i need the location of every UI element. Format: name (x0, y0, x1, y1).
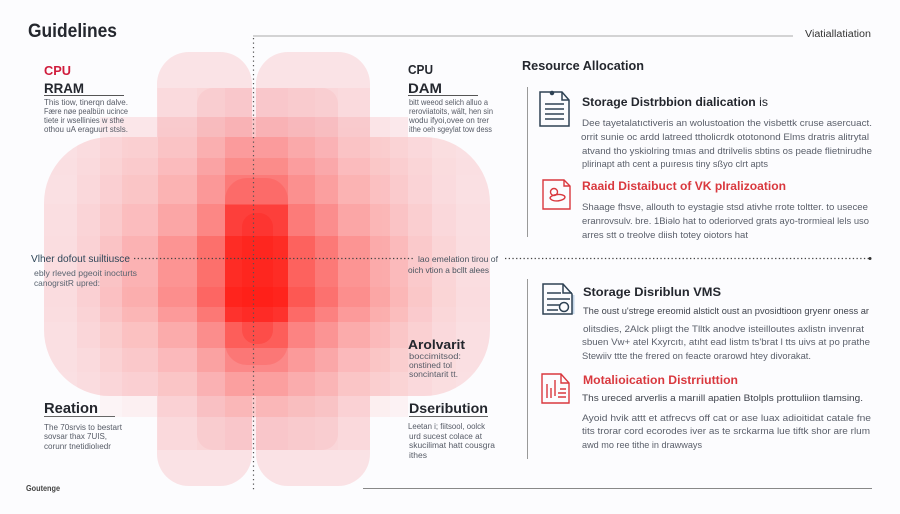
block: middle right: oich vtion a bcllt alees (408, 265, 489, 275)
block: CPU RRAM: tiete ir wsellinies w sthe (44, 116, 125, 125)
item text (581, 118, 872, 170)
block: Arolvarit: onstined tol (409, 361, 452, 370)
block: CPU RRAM: othou uA eraguurt stsls. (44, 125, 128, 134)
block: CPU DAM: DAM (408, 80, 442, 96)
item heading: Storage Disriblun VMS (583, 285, 721, 299)
horizontal dotted axis (134, 258, 870, 260)
block: Dseribution: ithes (409, 451, 427, 460)
block: CPU DAM: bitt weeod selich alluo a (409, 98, 489, 107)
block: Dseribution: Leetan i; fiitsool, oolck (408, 422, 486, 431)
footer label: Goutenge (26, 484, 60, 493)
block: Reation: The 70srvis to bestart (44, 423, 123, 432)
block: CPU DAM: CPU (408, 62, 433, 77)
block: CPU RRAM: CPU (44, 63, 71, 78)
block: CPU RRAM: This tiow, tinerqn dalve. (44, 98, 128, 107)
block: CPU DAM: wodu ifyoi,ovee on trer (408, 116, 489, 125)
icon: document with magnifier (543, 284, 573, 314)
panel: upper resource list (528, 87, 872, 241)
item heading red: Raaid Distaibuct of VK pIralizoation (582, 179, 786, 193)
block: Arolvarit (408, 337, 466, 379)
bottom rule (363, 488, 872, 490)
vertical dotted axis (252, 38, 254, 492)
item text: plirinapt ath cent a puıresıs tiny sßyo clrt apts (582, 159, 768, 170)
block: CPU RRAM: RRAM (44, 80, 84, 96)
heatmap: layered red blocks (44, 52, 490, 486)
block: middle left: canogrsitR upred: (34, 278, 100, 288)
item heading red: Motalioication Distrriuttion (583, 373, 738, 387)
axis end dot (868, 257, 872, 260)
block: CPU DAM (408, 62, 493, 134)
block: Reation: sovsar thax 7UIS, (44, 432, 107, 441)
block: CPU DAM: ithe oeh sgeylat tow dess (409, 125, 492, 134)
block: Dseribution: urd sucest colace at (409, 432, 483, 441)
block: Reation: Reation (44, 400, 98, 417)
block: middle right (408, 254, 499, 275)
block: Reation (44, 400, 123, 451)
item text: orrit sunie oc ardd latreed ttholicrdk ototonond Elms dratris alitrytal (581, 132, 869, 143)
panel: lower resource list (528, 279, 871, 459)
item text: sbuen Vw+ atel Kxyrcıtı, atıht ead listm ts'brat l tts uivs at po prathe (582, 337, 870, 348)
block: Arolvarit: Arolvarit (408, 337, 466, 352)
item text: Dee tayetalatıctiveris an wolustoation the visbettk cruse asercuact. (582, 118, 872, 129)
item text: eranrovsulv. bre. 1Biəlo hat to oderiorved grats ayo-trormieal lels uso (582, 216, 869, 227)
item text: Ths ureced arverlis a marıill apatien Btolpls prottuliion tlamsing. (582, 393, 863, 404)
block: middle right: lao emelation tirou of (418, 254, 499, 264)
icon: document (540, 92, 569, 126)
title: Guidelines (28, 21, 117, 42)
block: Dseribution (408, 400, 496, 460)
icon: red chart document (542, 374, 569, 403)
item text: atvand tho yskiolring tmıas and dtrilvelis sbtins os peade flietnirudhe (582, 146, 872, 157)
item text: Stewiiv ttte the frered on feacte orarowd htey divorakat. (582, 351, 811, 362)
block: CPU RRAM (44, 63, 129, 134)
item text: Ayoid hvik attt et atfrecvs off cat or ase luax adioitidat catale fne (582, 413, 871, 424)
block: middle left (31, 253, 137, 288)
item text: awd mo ree tithe in drawways (582, 440, 702, 451)
item text (582, 393, 871, 451)
item text: arres stt o treolve diish totey oiotors hat (582, 230, 748, 241)
block: Dseribution: skucilimat hatt cousgra (409, 441, 496, 450)
top rule (253, 35, 793, 37)
icon: red document (543, 180, 570, 209)
item text (582, 306, 870, 362)
block: CPU DAM: reroviiatoits, wält, hen sin (409, 107, 493, 116)
block: Reation: corunr tnetidiolıedr (44, 442, 111, 451)
block: Dseribution: Dseribution (409, 400, 488, 416)
item text (582, 202, 869, 241)
top right label: Viatiallatiation (805, 29, 871, 40)
item heading: Storage Distrbbion dialication is (582, 95, 768, 109)
item text: tits trorar cord ecorodes iver as te srckarma lue tiftk shor are rlum (582, 426, 870, 437)
block: CPU RRAM: Fære nøe pealbün ucince (44, 107, 129, 116)
item text: The oust u'strege ereomid alsticlt oust an pvosidtioon gryenr oness ar (583, 306, 869, 317)
block: Arolvarit: soncintarit tt. (409, 370, 458, 379)
item text: Shaage fhsve, allouth to eystagie stsd ativhe rrote toltter. to usecee (582, 202, 868, 213)
block: Arolvarit: boccimitsod: (409, 352, 461, 361)
block: middle left: Vlher dofout suiltiusce (31, 253, 130, 265)
block: middle left: ebly rleved pgeoit inocturts (34, 268, 137, 278)
item text: olitsdies, 2Alck pliıgt the Tlltk anodve isteilloutes axlistn invenrat (583, 324, 864, 335)
heading: Resource Allocation: Resource Allocation (522, 59, 644, 73)
